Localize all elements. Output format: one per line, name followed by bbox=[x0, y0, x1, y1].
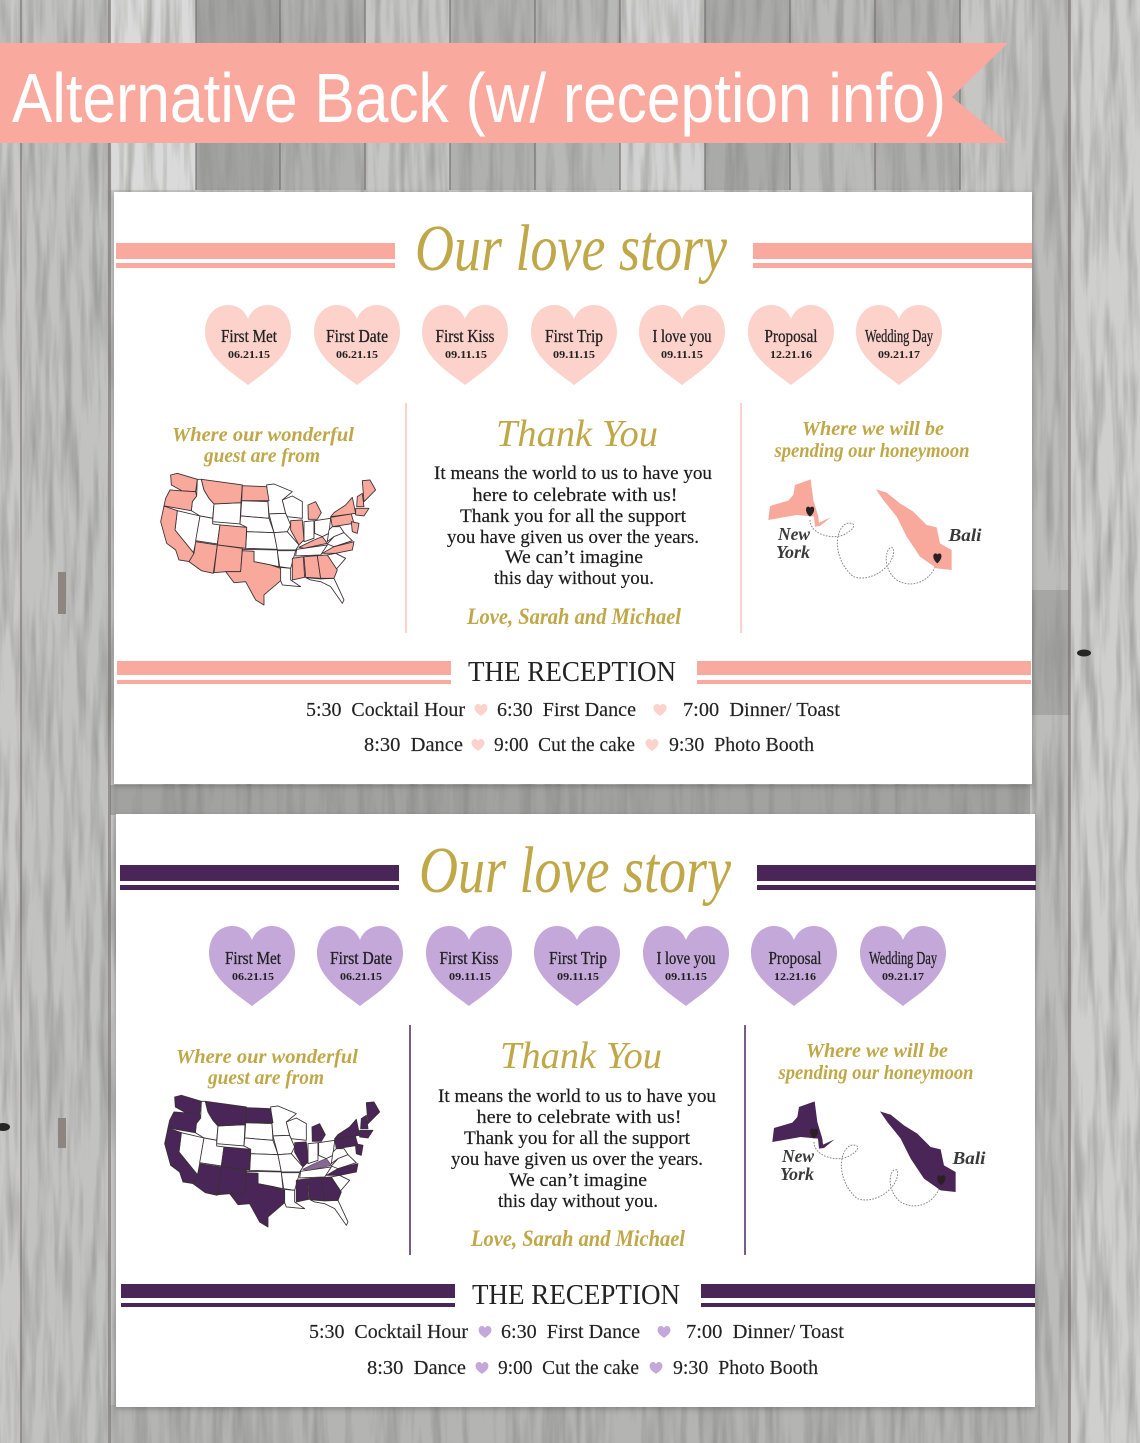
timeline hearts: 12.21.16 bbox=[770, 349, 813, 361]
banner title: Alternative Back (w/ reception info) bbox=[12, 59, 946, 137]
flight path bbox=[814, 1142, 941, 1206]
reception schedule: 6:30 First Dance bbox=[501, 1321, 640, 1343]
timeline hearts: 09.11.15 bbox=[557, 971, 600, 983]
guests caption: guest are from bbox=[203, 445, 320, 467]
header rules right bbox=[757, 865, 1036, 890]
thank you message: you have given us over the years. bbox=[447, 527, 699, 548]
timeline hearts: 09.11.15 bbox=[445, 349, 488, 361]
thank you message: Thank you for all the support bbox=[460, 506, 687, 527]
US map bbox=[165, 1095, 380, 1227]
timeline hearts: First Trip bbox=[549, 948, 607, 968]
timeline hearts: Proposal bbox=[764, 326, 818, 346]
reception schedule: 5:30 Cocktail Hour bbox=[306, 699, 465, 721]
guests caption: Where our wonderful bbox=[176, 1046, 358, 1068]
header rules right bbox=[753, 243, 1032, 268]
reception schedule: 5:30 Cocktail Hour bbox=[309, 1321, 468, 1343]
reception schedule: 8:30 Dance bbox=[367, 1357, 466, 1379]
reception rules right bbox=[697, 661, 1031, 684]
ribbon banner bbox=[0, 43, 1008, 143]
place labels: New bbox=[777, 524, 811, 544]
divider lines bbox=[409, 1025, 746, 1255]
flight path bbox=[810, 520, 937, 584]
reception schedule: 9:30 Photo Booth bbox=[669, 734, 814, 756]
signature: Love, Sarah and Michael bbox=[470, 1226, 686, 1251]
reception schedule: 9:00 Cut the cake bbox=[494, 734, 635, 756]
place labels: York bbox=[780, 1164, 814, 1184]
location hearts bbox=[806, 507, 941, 563]
header rules left bbox=[116, 243, 395, 268]
heading: the reception: THE RECEPTION bbox=[468, 657, 676, 688]
honeymoon caption bbox=[774, 418, 970, 462]
timeline hearts: 06.21.15 bbox=[336, 349, 379, 361]
heading: our love story: Our love story bbox=[419, 834, 732, 907]
timeline hearts: 09.11.15 bbox=[661, 349, 704, 361]
thank you message bbox=[434, 463, 712, 589]
timeline hearts: I love you bbox=[656, 948, 716, 968]
timeline hearts: 12.21.16 bbox=[774, 971, 817, 983]
timeline hearts: 06.21.15 bbox=[232, 971, 275, 983]
heading: thank you: Thank You bbox=[496, 413, 658, 455]
heading: the reception: THE RECEPTION bbox=[472, 1280, 680, 1311]
timeline hearts bbox=[209, 926, 946, 1006]
timeline hearts: First Met bbox=[221, 326, 277, 346]
reception schedule bbox=[306, 699, 840, 756]
timeline hearts: First Kiss bbox=[440, 948, 498, 968]
reception schedule: 6:30 First Dance bbox=[497, 699, 636, 721]
thank you message: Thank you for all the support bbox=[464, 1128, 691, 1149]
thank you message: It means the world to us to have you bbox=[438, 1086, 716, 1107]
thank you message bbox=[438, 1086, 716, 1212]
honeymoon caption bbox=[778, 1040, 974, 1084]
guests caption: Where our wonderful bbox=[172, 424, 354, 446]
timeline hearts: First Met bbox=[225, 948, 281, 968]
honeymoon caption: Where we will be bbox=[806, 1040, 948, 1062]
timeline hearts: First Trip bbox=[545, 326, 603, 346]
timeline hearts: 06.21.15 bbox=[228, 349, 271, 361]
reception rules right bbox=[701, 1284, 1035, 1307]
thank you message: this day without you. bbox=[498, 1191, 658, 1212]
header rules left bbox=[120, 865, 399, 890]
thank you message: We can’t imagine bbox=[505, 547, 643, 568]
New York and Bali shapes bbox=[772, 1101, 956, 1192]
thank you message: We can’t imagine bbox=[509, 1170, 647, 1191]
panel: pink card bbox=[114, 192, 1032, 786]
reception schedule: 9:30 Photo Booth bbox=[673, 1357, 818, 1379]
timeline hearts: First Date bbox=[330, 948, 392, 968]
thank you message: you have given us over the years. bbox=[451, 1149, 703, 1170]
timeline hearts: 09.21.17 bbox=[882, 971, 925, 983]
honeymoon caption: spending our honeymoon bbox=[774, 440, 970, 462]
timeline hearts bbox=[205, 305, 942, 385]
timeline hearts: Wedding Day bbox=[865, 326, 933, 346]
reception schedule bbox=[309, 1321, 844, 1379]
reception schedule: 8:30 Dance bbox=[364, 734, 463, 756]
US map bbox=[161, 473, 376, 605]
thank you message: here to celebrate with us! bbox=[476, 1107, 682, 1128]
reception rules left bbox=[121, 1284, 455, 1307]
place labels bbox=[780, 1146, 986, 1184]
guests caption bbox=[176, 1046, 358, 1089]
reception schedule: 7:00 Dinner/ Toast bbox=[686, 1321, 844, 1343]
place labels: Bali bbox=[951, 1148, 986, 1168]
reception rules left bbox=[117, 661, 451, 684]
honeymoon caption: Where we will be bbox=[802, 418, 944, 440]
heading: thank you: Thank You bbox=[500, 1035, 662, 1077]
place labels: Bali bbox=[947, 525, 982, 545]
honeymoon map bbox=[768, 479, 952, 584]
reception schedule: 9:00 Cut the cake bbox=[498, 1357, 639, 1379]
timeline hearts: First Kiss bbox=[436, 326, 494, 346]
place labels bbox=[776, 524, 982, 562]
heading: our love story: Our love story bbox=[415, 212, 728, 285]
timeline hearts: 06.21.15 bbox=[340, 971, 383, 983]
New York and Bali shapes bbox=[768, 479, 952, 570]
honeymoon map bbox=[772, 1101, 956, 1206]
thank you message: this day without you. bbox=[494, 568, 654, 589]
reception schedule: 7:00 Dinner/ Toast bbox=[683, 699, 840, 721]
timeline hearts: Wedding Day bbox=[869, 948, 937, 968]
place labels: New bbox=[781, 1146, 815, 1166]
thank you message: It means the world to us to have you bbox=[434, 463, 712, 484]
timeline hearts: 09.11.15 bbox=[553, 349, 596, 361]
location hearts bbox=[810, 1129, 945, 1185]
divider lines bbox=[405, 403, 742, 633]
timeline hearts: First Date bbox=[326, 326, 388, 346]
place labels: York bbox=[776, 542, 810, 562]
timeline hearts: I love you bbox=[652, 326, 712, 346]
signature: Love, Sarah and Michael bbox=[466, 604, 682, 629]
timeline hearts: 09.11.15 bbox=[665, 971, 708, 983]
guests caption bbox=[172, 424, 354, 467]
panel: purple card bbox=[116, 814, 1036, 1409]
guests caption: guest are from bbox=[207, 1067, 324, 1089]
timeline hearts: 09.21.17 bbox=[878, 349, 921, 361]
timeline hearts: Proposal bbox=[768, 948, 822, 968]
thank you message: here to celebrate with us! bbox=[472, 485, 678, 506]
honeymoon caption: spending our honeymoon bbox=[778, 1062, 974, 1084]
timeline hearts: 09.11.15 bbox=[449, 971, 492, 983]
